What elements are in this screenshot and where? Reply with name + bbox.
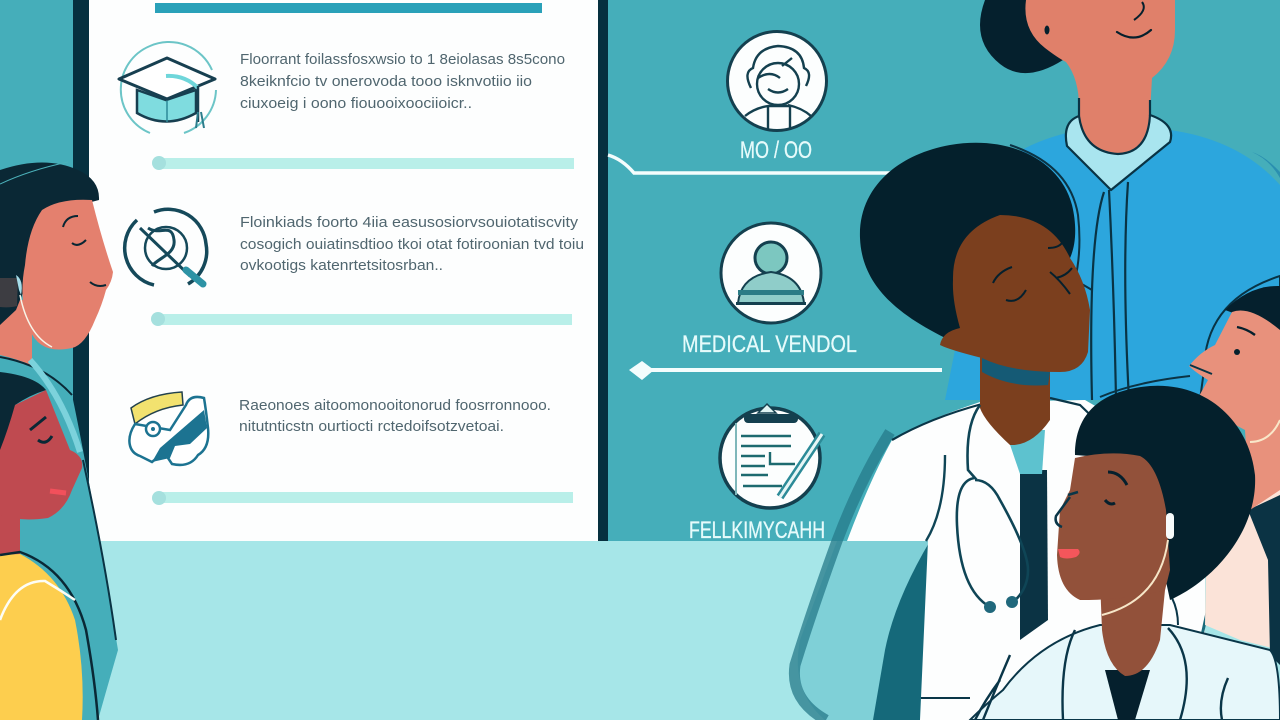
hair bbox=[1075, 386, 1255, 600]
panel: information list bbox=[73, 0, 608, 541]
neck bbox=[0, 500, 20, 565]
timeline: stage two bbox=[682, 223, 857, 358]
neck bbox=[0, 300, 32, 395]
scrubs bbox=[1020, 470, 1048, 640]
text block: third item: Raeonoes aitoomonooitonorud foosrronnooo. bbox=[239, 397, 551, 414]
text block: first item: ciuxoeig i oono fiouooixoociioicr.. bbox=[240, 95, 472, 112]
icon: cap and brain bbox=[129, 392, 208, 465]
hair bbox=[0, 372, 46, 450]
coat shadow wedge bbox=[873, 541, 930, 720]
timeline: stage three bbox=[689, 404, 825, 544]
translucent sleeve bbox=[798, 541, 930, 720]
text block: first item: 8keiknfcio tv onerovoda tooo isknvotiio iio bbox=[240, 73, 532, 90]
hair bbox=[0, 162, 99, 325]
text block: second item: ovkootigs katenrtetsitosrban.. bbox=[240, 257, 443, 274]
blue shirt bbox=[945, 128, 1280, 400]
earphone cable bbox=[1102, 540, 1168, 615]
figure: doctor with closed eyes bbox=[794, 143, 1212, 720]
hood arc bbox=[1100, 376, 1190, 397]
face bbox=[1057, 453, 1170, 600]
connector line one bbox=[608, 155, 905, 173]
collar bbox=[1066, 115, 1171, 190]
text block: second item: cosogich ouiatinsdtioo tkoi otat fotiroonian tvd toiu bbox=[240, 236, 584, 253]
scrubs bbox=[1105, 670, 1150, 720]
text block: second item: Floinkiads foorto 4iia easusosiorvsouiotatiscvity bbox=[240, 214, 579, 231]
text block: second item bbox=[240, 214, 584, 274]
face bbox=[22, 200, 113, 350]
hood outline bbox=[1010, 145, 1092, 290]
neck bbox=[980, 355, 1050, 445]
neck bbox=[1100, 580, 1166, 676]
figure: woman on the left bbox=[0, 162, 113, 395]
coat bbox=[847, 400, 1205, 720]
divider two bbox=[151, 312, 572, 326]
icon: scientist portrait bbox=[721, 223, 821, 323]
hood bbox=[1200, 276, 1280, 400]
chair outline bbox=[794, 432, 890, 720]
timeline: stage one bbox=[728, 32, 826, 164]
yellow top bbox=[0, 554, 83, 720]
floor band bbox=[90, 541, 1280, 720]
coat seams bbox=[975, 628, 1228, 720]
stethoscope bbox=[957, 405, 1028, 607]
figure: person in blue shirt bbox=[945, 0, 1280, 400]
divider three bbox=[152, 491, 573, 505]
text block: third item bbox=[239, 397, 551, 435]
hair bun bbox=[980, 0, 1063, 73]
icon: crossed instrument badge bbox=[125, 209, 207, 285]
hair bbox=[1225, 286, 1280, 330]
figure: person at far right bbox=[1189, 276, 1280, 665]
connector line two bbox=[629, 361, 942, 380]
icon: clipboard and pen bbox=[720, 404, 822, 508]
text block: first item: Floorrant foilassfosxwsio to 1 8eiolasas 8s5cono bbox=[240, 51, 565, 68]
icon: graduation cap bbox=[119, 42, 216, 133]
text block: third item: nitutnticstn ourtiocti rctedoifsotzvetoai. bbox=[239, 418, 504, 435]
placket bbox=[1091, 182, 1129, 400]
hair bbox=[860, 143, 1075, 345]
icon: student portrait bbox=[728, 32, 826, 130]
garment bbox=[1205, 460, 1280, 650]
hood bbox=[0, 355, 118, 720]
face bbox=[0, 390, 82, 519]
face bbox=[1189, 310, 1280, 510]
coat bbox=[970, 625, 1280, 720]
label: MO / OO bbox=[740, 137, 812, 164]
face bbox=[940, 215, 1090, 372]
face and neck bbox=[1025, 0, 1175, 155]
label: MEDICAL VENDOL bbox=[682, 331, 857, 358]
label: FELLKIMYCAHH bbox=[689, 517, 825, 544]
divider one bbox=[152, 156, 574, 170]
text block: first item bbox=[240, 51, 565, 112]
top accent bar bbox=[155, 3, 542, 13]
figure: woman in yellow bbox=[0, 355, 118, 720]
figure: doctor in front bbox=[970, 376, 1280, 720]
